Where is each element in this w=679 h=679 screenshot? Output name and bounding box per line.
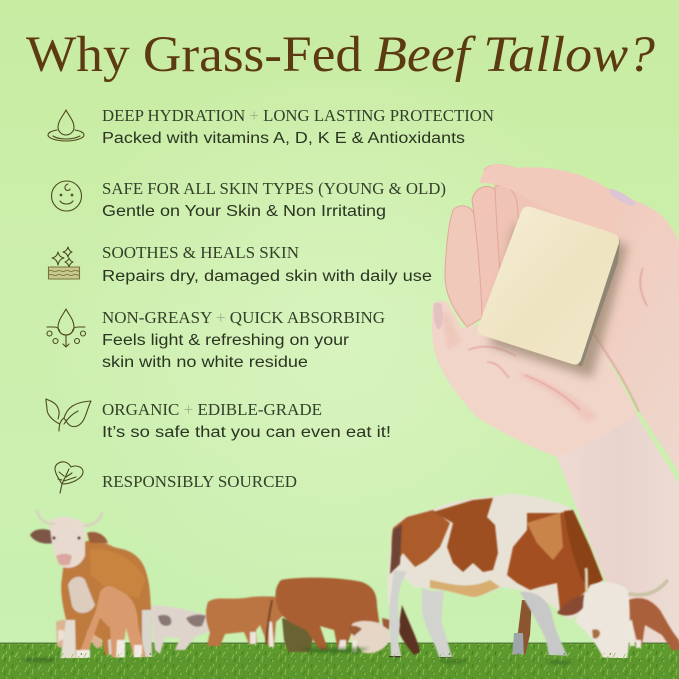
soap bar <box>477 207 620 366</box>
palm pink shading <box>440 312 598 423</box>
photo: hands holding soap <box>432 164 679 660</box>
hooves <box>389 655 568 662</box>
right hand <box>483 164 679 473</box>
benefit: safe for all skin types <box>52 179 446 220</box>
far right small cow <box>622 598 679 650</box>
left palm <box>432 301 637 457</box>
body <box>387 494 603 620</box>
far front leg <box>512 600 532 660</box>
text: safe to eat: It’s so safe that you can even eat it! <box>102 424 391 441</box>
right thumbnail <box>609 189 636 206</box>
heading: safe for all skin types: SAFE FOR ALL SKIN TYPES (YOUNG & OLD) <box>102 179 446 198</box>
rear far leg <box>398 605 420 655</box>
heading: deep hydration: DEEP HYDRATION + LONG LASTING PROTECTION <box>102 106 494 125</box>
text: repairs: Repairs dry, damaged skin with daily use <box>102 268 432 285</box>
front leg <box>520 592 568 662</box>
heading: organic: ORGANIC + EDIBLE-GRADE <box>102 400 322 419</box>
heading: soothes and heals: SOOTHES & HEALS SKIN <box>102 243 299 262</box>
left thumbnail <box>434 303 443 330</box>
icon: drop absorbing into skin <box>47 309 86 347</box>
heading: non-greasy: NON-GREASY + QUICK ABSORBING <box>102 308 385 327</box>
brown patches <box>390 498 603 610</box>
soap shadow <box>490 225 628 378</box>
dark spotted calf <box>282 618 315 652</box>
icon: baby face <box>52 181 82 211</box>
head <box>557 568 667 665</box>
icon: water drop with ripple <box>48 110 84 141</box>
large grazing cow <box>387 494 667 665</box>
benefit: responsibly sourced <box>55 462 297 493</box>
text: vitamins: Packed with vitamins A, D, K E & Antioxidants <box>102 130 465 147</box>
palm creases <box>468 347 580 410</box>
rear legs <box>389 570 452 661</box>
cow standing left <box>30 511 152 662</box>
benefit: deep hydration <box>48 106 494 147</box>
heading: responsibly sourced: RESPONSIBLY SOURCED <box>102 472 297 491</box>
brown cow centre <box>266 578 390 653</box>
text: no residue: skin with no white residue <box>102 354 308 371</box>
grass field <box>0 642 679 679</box>
benefit: organic <box>46 399 391 441</box>
title: Why Grass-Fed <box>26 27 362 83</box>
calf in front <box>76 586 146 662</box>
brown cow grazing behind <box>206 596 287 647</box>
icon: heart leaf <box>55 462 83 493</box>
title: Beef Tallow? <box>374 27 656 83</box>
right hand crease <box>592 268 647 412</box>
benefit: soothes and heals <box>48 243 432 285</box>
title <box>26 27 656 83</box>
white speckled calf <box>150 606 213 654</box>
forearms <box>557 395 679 660</box>
small calf far left <box>56 620 103 649</box>
fingers <box>445 185 519 327</box>
top finger <box>480 164 622 235</box>
text: feels light: Feels light & refreshing on your <box>102 332 349 349</box>
text: gentle: Gentle on Your Skin & Non Irritating <box>102 203 386 220</box>
icon: sparkling skin layers <box>48 247 80 279</box>
benefit: non-greasy <box>47 308 385 371</box>
cow herd <box>30 494 679 665</box>
grass foreground <box>0 648 679 679</box>
icon: two leaves <box>46 399 91 431</box>
